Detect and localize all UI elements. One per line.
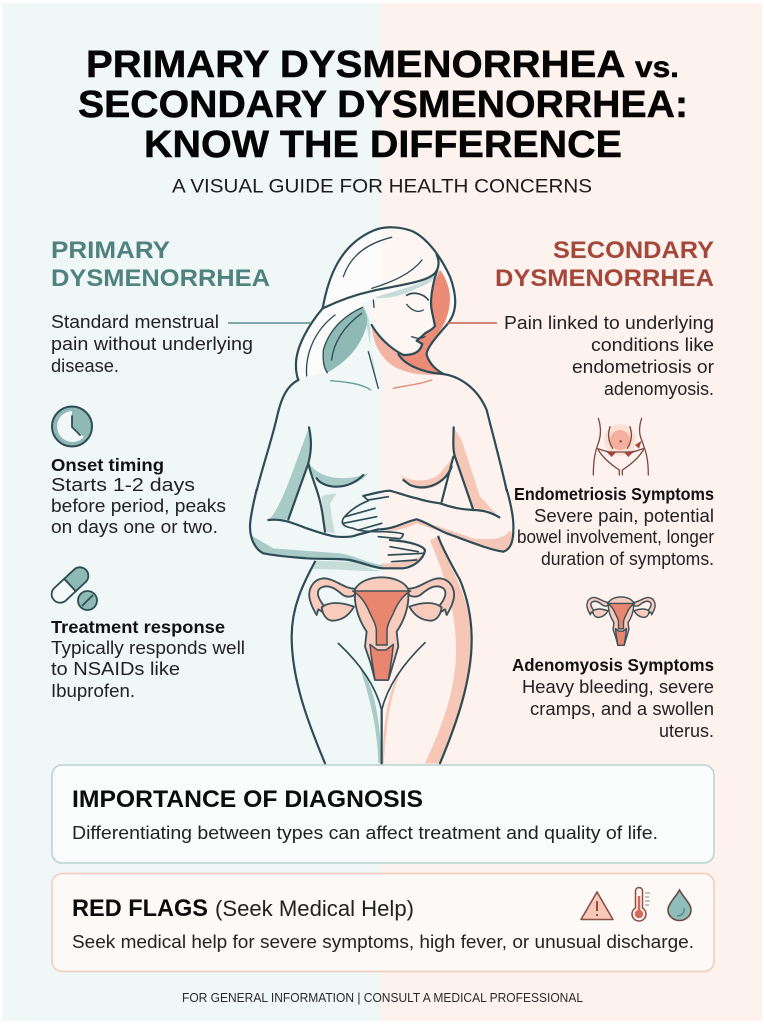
- face fill: [368, 270, 437, 355]
- text: primary definition: pain without underlying: [51, 334, 253, 354]
- subtitle: A VISUAL GUIDE FOR HEALTH CONCERNS: [172, 176, 592, 198]
- fine lines: [306, 237, 432, 390]
- heading: secondary dysmenorrhea: DYSMENORRHEA: [495, 265, 714, 292]
- text: onset timing: Starts 1-2 days: [51, 475, 195, 495]
- heading: secondary dysmenorrhea: SECONDARY: [553, 237, 714, 264]
- text: endometriosis symptoms: bowel involvement, longer: [517, 527, 714, 547]
- text: treatment response: Ibuprofen.: [51, 681, 135, 701]
- panel: red flags: Seek medical help for severe symptoms, high fever, or unusual discharge.: [72, 932, 694, 952]
- left chest shading: [268, 427, 311, 520]
- text: treatment response: Typically responds well: [51, 638, 245, 658]
- text: onset timing: before period, peaks: [51, 496, 226, 516]
- panel: red flags: (Seek Medical Help): [215, 896, 414, 921]
- icon: clock: [52, 406, 92, 446]
- outlines: [257, 227, 507, 532]
- heading: primary dysmenorrhea: DYSMENORRHEA: [51, 265, 270, 292]
- teal hair: [323, 307, 367, 373]
- text: onset timing: on days one or two.: [51, 517, 218, 537]
- text: adenomyosis symptoms: Heavy bleeding, severe: [522, 677, 714, 697]
- text: adenomyosis symptoms: cramps, and a swollen: [530, 699, 714, 719]
- text: secondary definition: endometriosis or: [572, 357, 714, 377]
- text: endometriosis symptoms: Severe pain, potential: [534, 506, 714, 526]
- connector: primary: [228, 322, 310, 324]
- hands: [338, 496, 425, 710]
- text: primary definition: Standard menstrual: [51, 312, 219, 332]
- panel: importance of diagnosis: IMPORTANCE OF DIAGNOSIS: [72, 786, 423, 813]
- panel: red flags: RED FLAGS: [72, 895, 208, 922]
- text: adenomyosis symptoms: Adenomyosis Symptoms: [512, 655, 714, 675]
- hair fill: [296, 227, 455, 380]
- hair shade under fringe: [375, 270, 437, 298]
- panel: red flags: [52, 874, 714, 972]
- text: onset timing: [51, 455, 226, 537]
- title: [78, 44, 688, 166]
- text: secondary definition: adenomyosis.: [604, 379, 714, 399]
- icon: thermometer: [632, 888, 650, 921]
- footer: FOR GENERAL INFORMATION | CONSULT A MEDICAL PROFESSIONAL: [182, 991, 583, 1005]
- neck shading: [372, 327, 442, 375]
- heading: secondary dysmenorrhea: [495, 237, 714, 292]
- salmon hair: [398, 270, 450, 374]
- icon: pelvis with endometriosis pain: [593, 418, 648, 475]
- right arm shading: [382, 519, 512, 552]
- central figure: [250, 227, 513, 764]
- text: secondary definition: conditions like: [591, 335, 714, 355]
- icon: drop: [668, 890, 691, 921]
- text: adenomyosis symptoms: [512, 655, 714, 741]
- text: primary definition: disease.: [51, 356, 119, 376]
- heading: primary dysmenorrhea: PRIMARY: [51, 237, 170, 264]
- text: primary definition: [51, 312, 253, 376]
- hair fill: right half tint: [382, 227, 440, 291]
- text: treatment response: [51, 617, 245, 701]
- connector: secondary: [447, 322, 497, 324]
- text: onset timing: Onset timing: [51, 455, 164, 475]
- text: endometriosis symptoms: Endometriosis Symptoms: [514, 484, 714, 504]
- title: KNOW THE DIFFERENCE: [144, 124, 622, 166]
- panel: importance of diagnosis: [52, 765, 714, 863]
- background: primary side: [2, 3, 381, 1021]
- text: treatment response: Treatment response: [51, 617, 225, 637]
- text: secondary definition: [504, 313, 714, 399]
- inner thigh shading: [359, 666, 382, 763]
- figure: lower body: [250, 489, 513, 764]
- text: endometriosis symptoms: duration of symptoms.: [541, 549, 714, 569]
- text: adenomyosis symptoms: uterus.: [659, 721, 714, 741]
- icon: warning triangle: [581, 892, 613, 920]
- title: SECONDARY DYSMENORRHEA:: [78, 84, 688, 126]
- icon: pills: [48, 564, 97, 610]
- outlines: [250, 489, 513, 764]
- title: PRIMARY DYSMENORRHEA vs.: [86, 44, 679, 86]
- heading: primary dysmenorrhea: [51, 237, 270, 292]
- text: secondary definition: Pain linked to underlying: [504, 313, 714, 333]
- figure: upper body and head: [257, 227, 507, 533]
- lower hand shading: [382, 555, 423, 569]
- background: secondary side: [381, 3, 762, 1021]
- panel: importance of diagnosis: Differentiating between types can affect treatment and quality of life.: [72, 823, 658, 843]
- text: endometriosis symptoms: [514, 484, 714, 569]
- left arm shading: [251, 535, 383, 569]
- icon: uterus small: [587, 597, 655, 645]
- uterus: [309, 577, 454, 680]
- right chest shading: [454, 427, 499, 517]
- right hip shading: [425, 537, 472, 763]
- text: treatment response: to NSAIDs like: [51, 659, 180, 679]
